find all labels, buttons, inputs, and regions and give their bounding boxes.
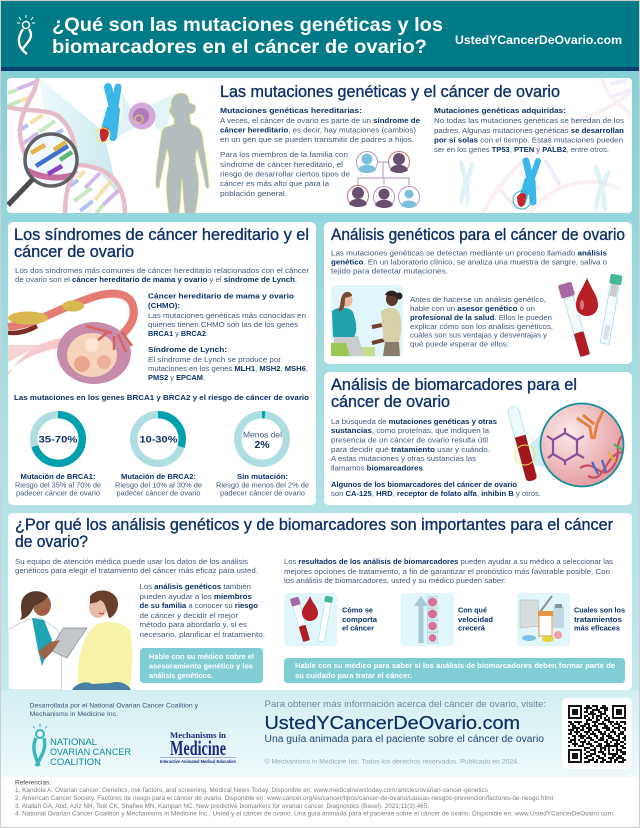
panel: análisis de biomarcadores <box>324 372 632 505</box>
references: Referencias: <box>15 780 51 786</box>
callout: asesoramiento: asesoramiento genético y los <box>149 662 253 670</box>
text: intro: de ovario son el cáncer hereditario de mama y ovario y el síndrome de Lynch. <box>15 275 297 284</box>
illustration: doctor and patient <box>8 590 132 690</box>
text: búsqueda: A estas mutaciones y otras sustancias las <box>331 454 476 463</box>
icon: medicines <box>517 593 570 646</box>
icon: blood tube, drop and swab <box>558 274 623 357</box>
tagline: Una guía animada para el paciente sobre el cáncer de ovario <box>264 734 544 745</box>
text: CHMO: Cáncer hereditario de mama y ovario <box>148 292 294 300</box>
text: resultados: mejores opciones de tratamiento, a fin de garantizar el pronóstico más favorable posible. Con <box>284 567 610 576</box>
references: 4. National Ovarian Cancer Coalition y Mechanisms in Medicine Inc., Usted y el cáncer de ovario. Una guía animada para el paciente sobre el cáncer de ovario. Disponible en: www.UstedYCancerDeOvario.com <box>15 810 613 818</box>
text: hereditarias: riesgo de desarrollar ciertos tipos de <box>220 170 350 178</box>
text: miembros de su familia: pueden ayudar a los miembros <box>140 592 252 601</box>
text: búsqueda: para decidir qué tratamiento usar y cuándo. <box>331 445 490 454</box>
references: 1. Kandola A. Ovarian cancer: Genetics, risk factors, and screening. Medical News Today. Disponible en: www.medicalnewstoday.com/articles/ovarian-cancer-genetics <box>15 787 488 794</box>
text: adquiridas <box>434 106 624 154</box>
illustration: genetic counselling <box>331 285 403 357</box>
text: adquiridas: por sí solas con el tiempo. Estas mutaciones pueden <box>434 136 623 144</box>
icon: growth arrow and cells <box>401 593 454 646</box>
title <box>52 14 443 58</box>
label: con qué velocidad: crecerá <box>458 624 486 632</box>
text: algunos biomarcadores <box>331 480 541 498</box>
label: sin mutación: Riesgo de menos del 2% de <box>216 480 309 490</box>
label: BRCA2 <box>115 472 202 498</box>
text: más información: Para obtener más información acerca del cáncer de ovario, visite: <box>264 699 546 710</box>
text: equipo <box>15 557 258 575</box>
title: ¿Qué son las mutaciones genéticas y los <box>52 14 443 36</box>
text: adquiridas: No todas las mutaciones genéticas se heredan de los <box>434 116 624 125</box>
text: miembros de su familia <box>140 582 265 639</box>
icon: tube, drop and swab <box>284 593 337 646</box>
label: cómo se comporta <box>342 606 378 632</box>
text: Lynch: Síndrome de Lynch: <box>148 345 227 354</box>
label: cuáles son los tratamientos: Cuales son los <box>574 606 625 614</box>
donut chart: BRCA1: 35-70% <box>38 434 78 446</box>
text: hereditarias: en un gen que se pueden transmitir de padres a hijos. <box>220 135 414 144</box>
text: equipo: Su equipo de atención médica puede usar los datos de los análisis <box>15 557 248 566</box>
credit text: Mechanisms in Medicine Inc. <box>30 711 118 718</box>
website url: UstedYCancerDeOvario.com <box>264 712 520 733</box>
illustration: blood tube with magnified biomarkers <box>507 404 626 486</box>
panel: las mutaciones genéticas <box>5 76 640 215</box>
QR code <box>562 698 632 769</box>
text: búsqueda: presencia de un cáncer de ovario resulta útil <box>331 436 488 444</box>
callout: asesoramiento: análisis genéticos. <box>149 671 213 680</box>
icon: ribbon logo <box>17 15 35 54</box>
logo: Mechanisms in Medicine: Interactive Animated Medical Education <box>160 759 236 764</box>
text: miembros de su familia: necesario, planificar el tratamiento. <box>140 630 265 639</box>
text: CHMO <box>148 292 306 338</box>
text: hereditarias: población general. <box>220 189 287 198</box>
logo: Mechanisms in Medicine: Mechanisms in <box>170 731 227 740</box>
label: BRCA1: padecer cáncer de ovario <box>16 488 100 498</box>
icon: chromosome with mutation <box>513 161 538 209</box>
credit text <box>30 702 199 718</box>
text: Lynch <box>148 345 308 382</box>
text: asesor genético: cuáles son sus ventajas y desventajas y <box>410 330 547 340</box>
heading: cáncer de ovario <box>14 243 134 261</box>
heading <box>14 226 309 261</box>
text: asesor genético: Antes de hacerse un análisis genético, <box>410 295 546 304</box>
logo: National Ovarian Cancer Coalition <box>33 724 131 768</box>
references <box>15 780 613 818</box>
text: CHMO: quienes tienen CHMO son las de los genes <box>148 320 298 329</box>
icon: chromosome <box>96 87 118 142</box>
donut chart: BRCA2: 10-30% <box>140 434 178 446</box>
header banner <box>0 1 640 71</box>
label: cuáles son los tratamientos: tratamientos <box>574 615 622 624</box>
text: miembros de su familia: de cáncer y decidir el mejor <box>140 611 238 620</box>
text: Lynch: mutaciones en los genes MLH1, MSH2, MSH6, <box>148 364 308 373</box>
text: resultados <box>284 557 613 585</box>
text: miembros de su familia: método para abordarlo y, si es <box>140 620 247 629</box>
heading: ¿Por qué los análisis genéticos y de biomarcadores son importantes para el cáncer <box>15 516 613 534</box>
label: con qué velocidad: Con qué <box>458 606 488 614</box>
label: cómo se comporta: comporta <box>342 615 378 624</box>
label: BRCA2: Mutación de BRCA2: <box>121 472 196 481</box>
label: BRCA2: padecer cáncer de ovario <box>116 488 200 498</box>
text: Lynch: PMS2 y EPCAM. <box>148 373 205 382</box>
text: búsqueda: llamamos biomarcadores. <box>331 464 425 472</box>
donut chart: BRCA1 <box>34 415 82 463</box>
label: cómo se comporta: Cómo se <box>342 606 374 614</box>
heading: Análisis genéticos para el cáncer de ovario <box>331 226 625 244</box>
text: asesor genético: hable con un asesor genético o un <box>410 304 535 313</box>
text: búsqueda: La búsqueda de mutaciones genéticas y otras <box>331 417 497 426</box>
text: CHMO: Las mutaciones genéticas más conocidas en <box>148 311 306 320</box>
icon: cell <box>128 102 156 130</box>
text: hereditarias: cáncer hereditario, es decir, hay mutaciones (cambios) <box>220 126 416 134</box>
text: asesor genético: profesional de la salud. Ellos le pueden <box>410 313 552 322</box>
callout: biomarcadores: Hable con su médico para saber si los análisis de biomarcadores deben formar parte de <box>295 661 616 670</box>
credit text: Desarrollada por el National Ovarian Cancer Coalition y <box>30 702 199 710</box>
label: BRCA2: Riesgo del 10% al 30% de <box>115 480 202 490</box>
footer band <box>0 690 640 777</box>
icon: magnifying glass <box>8 134 77 205</box>
text: hereditarias: síndrome de cáncer hereditario, el <box>220 160 343 169</box>
text: adquiridas: padres. Algunas mutaciones genéticas se desarrollan <box>434 126 624 135</box>
text: intro: tejido para detectar mutaciones. <box>331 266 448 276</box>
label: cuáles son los tratamientos <box>574 606 625 632</box>
heading <box>331 376 577 411</box>
label: con qué velocidad: velocidad <box>458 615 493 624</box>
label: BRCA1 <box>15 472 101 498</box>
text: hereditarias: Para los miembros de la familia con <box>220 150 348 159</box>
text: hereditarias: Mutaciones genéticas hereditarias: <box>220 106 362 115</box>
decorative DNA right <box>482 78 640 215</box>
callout: asesoramiento: Hable con su médico sobre el <box>149 652 254 661</box>
references: 3. Atallah GA, Abd. Aziz NH, Teik CK, Shafiee MN, Kampan NC. New predictive biomarkers for ovarian cancer. Diagnostics (Basel). 2021;11(3):465. <box>15 803 429 810</box>
heading: Las mutaciones genéticas y el cáncer de ovario <box>220 83 560 101</box>
heading: Los síndromes de cáncer hereditario y el <box>14 226 309 244</box>
heading <box>15 516 613 551</box>
text: asesor genético: qué puede esperar de ellos. <box>410 340 509 348</box>
text: intro: Las mutaciones genéticas se detectan mediante un proceso llamado análisis <box>331 248 607 258</box>
label: cómo se comporta: el cáncer <box>342 624 374 632</box>
label: cuáles son los tratamientos: más eficaces <box>574 624 620 632</box>
label: con qué velocidad <box>458 606 493 632</box>
panel: síndromes de cáncer hereditario <box>8 222 316 505</box>
donut chart: sin mutación: Menos del <box>243 430 282 440</box>
donut chart: sin mutación <box>238 415 286 463</box>
text: hereditarias <box>220 106 421 198</box>
website link: UstedYCancerDeOvario.com <box>455 35 622 47</box>
text: adquiridas: ser en los genes TP53, PTEN y PALB2, entre otros. <box>434 145 609 154</box>
heading: de ovario? <box>15 533 88 551</box>
logo: National Ovarian Cancer Coalition: OVARIAN CANCER <box>50 747 131 758</box>
text: hereditarias: A veces, el cáncer de ovario es parte de un síndrome de <box>220 116 421 125</box>
text: resultados: los análisis de biomarcadores, usted y su médico pueden saber: <box>284 576 506 585</box>
text: intro <box>15 266 309 284</box>
page background <box>0 71 640 691</box>
text: búsqueda: sustancias, como proteínas, que indiquen la <box>331 426 490 435</box>
copyright: © Mechanisms in Medicine Inc. Todos los derechos reservados. Publicado en 2024. <box>264 758 519 766</box>
icon: family tree <box>348 152 420 208</box>
callout: biomarcadores <box>284 658 625 683</box>
label: sin mutación: padecer cáncer de ovario <box>220 488 305 498</box>
title: biomarcadores en el cáncer de ovario? <box>52 36 427 58</box>
illustration: DNA to woman silhouette <box>5 76 640 215</box>
panel: por qué los análisis son importantes <box>8 513 632 690</box>
text: miembros de su familia: de su familia a conocer su riesgo <box>140 601 258 610</box>
illustration: ovary and fallopian tube <box>8 294 134 384</box>
logo: National Ovarian Cancer Coalition: COALITION <box>50 757 101 768</box>
text: asesor genético <box>410 295 553 348</box>
subheading: BRCA risk: Las mutaciones en los genes BRCA1 y BRCA2 y el riesgo de cáncer de ovario <box>14 393 309 402</box>
donut chart: BRCA2 <box>134 415 182 463</box>
callout: asesoramiento <box>140 648 263 683</box>
text: búsqueda <box>331 417 497 472</box>
text: intro: genético. En un laboratorio clínico, se analiza una muestra de sangre, saliva o <box>331 258 607 266</box>
text: hereditarias: cáncer es más alto que para la <box>220 179 330 188</box>
heading: cáncer de ovario <box>331 393 450 411</box>
label: sin mutación: Sin mutación: <box>237 472 288 481</box>
text: miembros de su familia: Los análisis genéticos también <box>140 582 251 591</box>
heading: Análisis de biomarcadores para el <box>331 376 577 394</box>
text: asesor genético: explicar cómo son los análisis genéticos, <box>410 322 553 331</box>
label: BRCA1: Riesgo del 35% al 70% de <box>15 480 101 490</box>
text: intro <box>331 248 607 276</box>
panel: análisis genéticos <box>324 222 632 364</box>
logo: National Ovarian Cancer Coalition: NATIONAL <box>50 737 97 748</box>
icon: woman silhouette <box>156 93 209 215</box>
logo: Mechanisms in Medicine: Medicine <box>170 736 226 760</box>
text: algunos biomarcadores: Algunos de los biomarcadores del cáncer de ovario <box>331 480 517 489</box>
text: adquiridas: Mutaciones genéticas adquiridas: <box>434 106 566 115</box>
text: intro: Los dos síndromes más comunes de cáncer hereditario relacionados con el cáncer <box>15 266 309 275</box>
text: CHMO: (CHMO): <box>148 301 180 310</box>
references: 2. American Cancer Society. Factores de riesgo para el cáncer de ovario. Disponible en: www.cancer.org/es/cancer/tipos/cancer-de-ovario/causas-riesgos-prevencion/factores-de-riesgo.html <box>15 795 553 802</box>
donut chart: sin mutación: 2% <box>254 439 270 451</box>
text: Lynch: El síndrome de Lynch se produce por <box>148 355 281 364</box>
label: BRCA1: Mutación de BRCA1: <box>20 472 96 481</box>
logo: Mechanisms in Medicine <box>160 731 236 764</box>
text: equipo: genéticos para elegir el tratamiento del cáncer más eficaz para usted. <box>15 566 258 575</box>
callout: biomarcadores: su cuidado para tratar el cáncer. <box>295 671 412 680</box>
text: algunos biomarcadores: son CA-125, HRD, receptor de folato alfa, inhibin B y otros. <box>331 489 541 498</box>
text: CHMO: BRCA1 y BRCA2. <box>148 329 208 338</box>
label: sin mutación <box>216 472 309 498</box>
text: resultados: Los resultados de los análisis de biomarcadores pueden ayudar a su médico a seleccionar las <box>284 557 613 566</box>
